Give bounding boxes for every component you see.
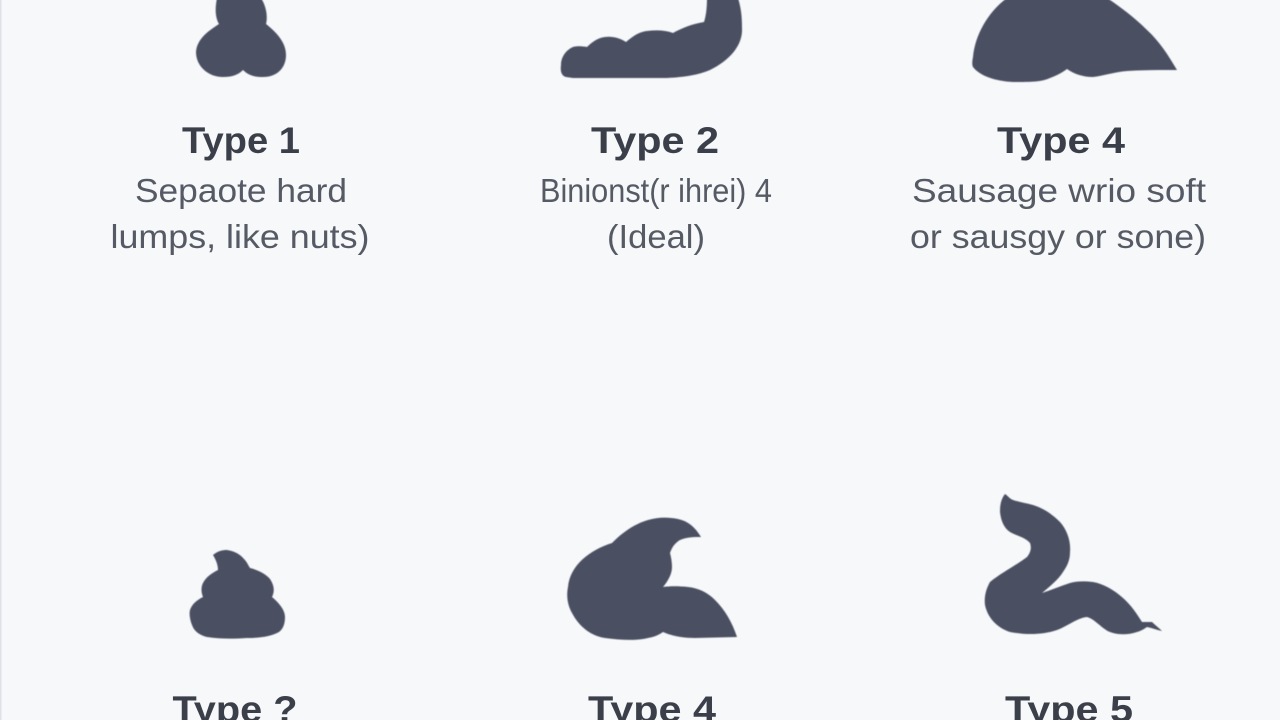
text: type 2 description: (Ideal) <box>607 218 705 255</box>
icon: type 4 smooth mound <box>972 0 1177 82</box>
panel: type 2 <box>540 0 772 255</box>
text: type 1 description: lumps, like nuts) <box>110 218 370 255</box>
text: type 2 description: Binionst(r ihrei) 4 <box>540 172 772 209</box>
panel: type 1 <box>110 0 370 255</box>
icon: snake <box>985 494 1162 634</box>
heading: type 4 upper: Type 4 <box>997 120 1125 161</box>
text: type 1 description: Sepaote hard <box>135 172 347 209</box>
text: type 4 upper description <box>910 172 1206 255</box>
panel: type 4 upper <box>910 0 1206 255</box>
heading: type 1: Type 1 <box>182 120 300 161</box>
icon: curled blob <box>567 518 737 640</box>
text: type 4 upper description: Sausage wrio soft <box>912 172 1206 209</box>
panel: type 4 lower <box>567 518 737 720</box>
text: type 1 description <box>110 172 370 255</box>
icon: type 1 lumps <box>196 0 286 77</box>
panel: type 2 lower <box>172 550 298 720</box>
text: type 4 upper description: or sausgy or sone) <box>910 218 1206 255</box>
text: type 2 description <box>540 172 772 255</box>
icon: type 2 lumpy sausage <box>561 0 742 78</box>
icon: coiled mound <box>190 550 285 639</box>
panel: type 5 <box>985 494 1162 720</box>
heading: type 2: Type 2 <box>591 120 719 161</box>
